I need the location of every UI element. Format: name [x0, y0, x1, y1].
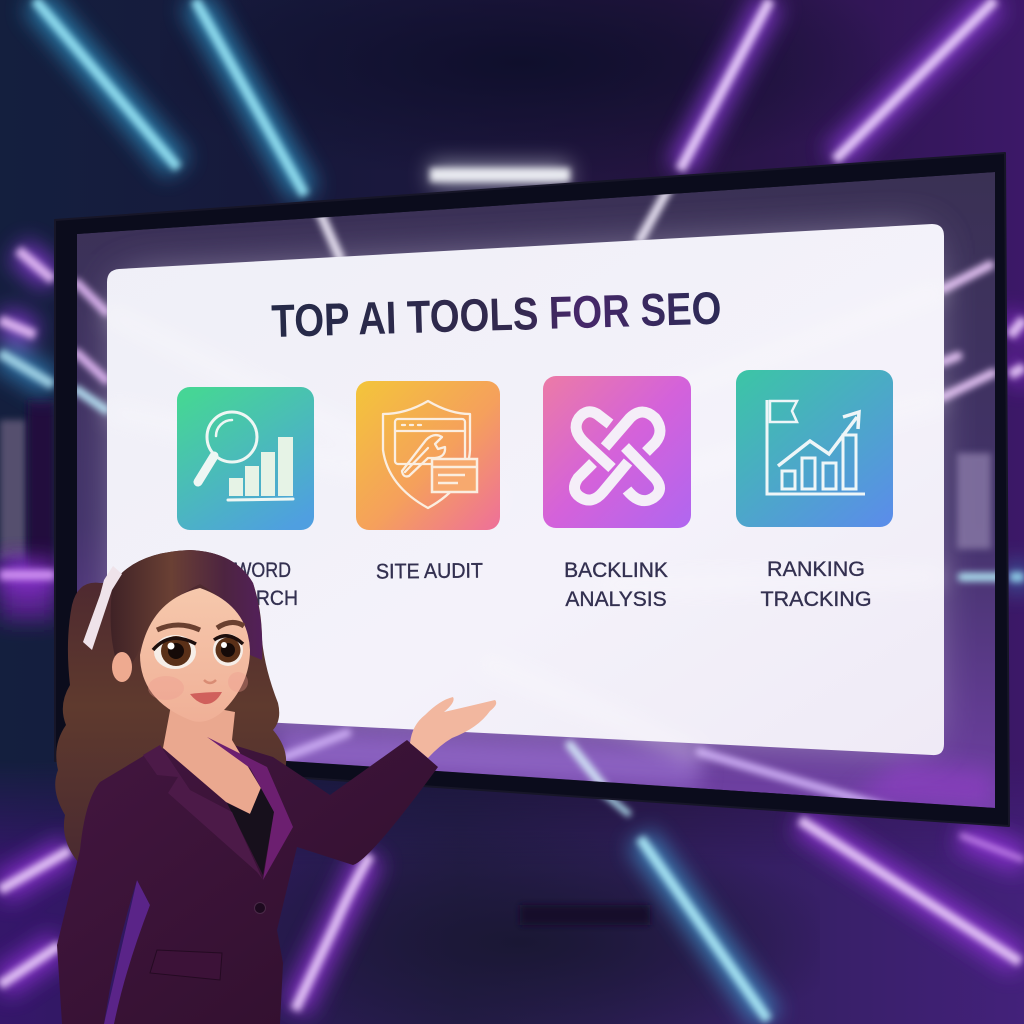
label: keyword research: KEYWORD [199, 559, 291, 582]
hair back [55, 550, 286, 862]
card: backlink analysis [543, 376, 691, 611]
mouth [190, 692, 222, 704]
panel light streaks [107, 289, 944, 755]
blouse [227, 785, 274, 875]
hair top [111, 550, 262, 680]
label: backlink analysis: ANALYSIS [565, 588, 667, 611]
blush [148, 672, 248, 700]
jacket and arm [57, 737, 438, 1024]
pocket [150, 950, 222, 980]
label: keyword research: RESEARCH [190, 587, 298, 610]
icon: growth chart with flag [736, 370, 893, 527]
title: TOP AI TOOLS FOR SEO [271, 282, 722, 347]
left lapel [143, 745, 263, 880]
icon: chain links [543, 376, 691, 528]
label: ranking tracking: TRACKING [760, 587, 872, 611]
card: keyword research [177, 387, 314, 610]
arm gap [104, 880, 150, 1024]
right lapel [207, 737, 293, 880]
icon: shield and wrench [356, 381, 500, 530]
screen frame [55, 153, 1009, 826]
card: ranking tracking [736, 370, 893, 611]
eyes [153, 622, 244, 669]
ribbon [83, 566, 122, 650]
label: backlink analysis: BACKLINK [564, 559, 668, 582]
character: presenter [55, 550, 496, 1024]
white content panel [107, 224, 944, 755]
glass reflections [77, 182, 1000, 812]
glass screen [77, 172, 1000, 812]
button [254, 902, 266, 914]
skin: neck and chest [163, 700, 262, 814]
ear [112, 652, 132, 682]
label: site audit: SITE AUDIT [376, 560, 483, 583]
hand [410, 697, 496, 758]
icon: magnifier and bars [177, 387, 314, 530]
face [140, 588, 250, 722]
label: ranking tracking: RANKING [767, 557, 865, 581]
label: keyword research [190, 559, 298, 610]
nose [204, 680, 216, 683]
card: site audit [356, 381, 500, 583]
